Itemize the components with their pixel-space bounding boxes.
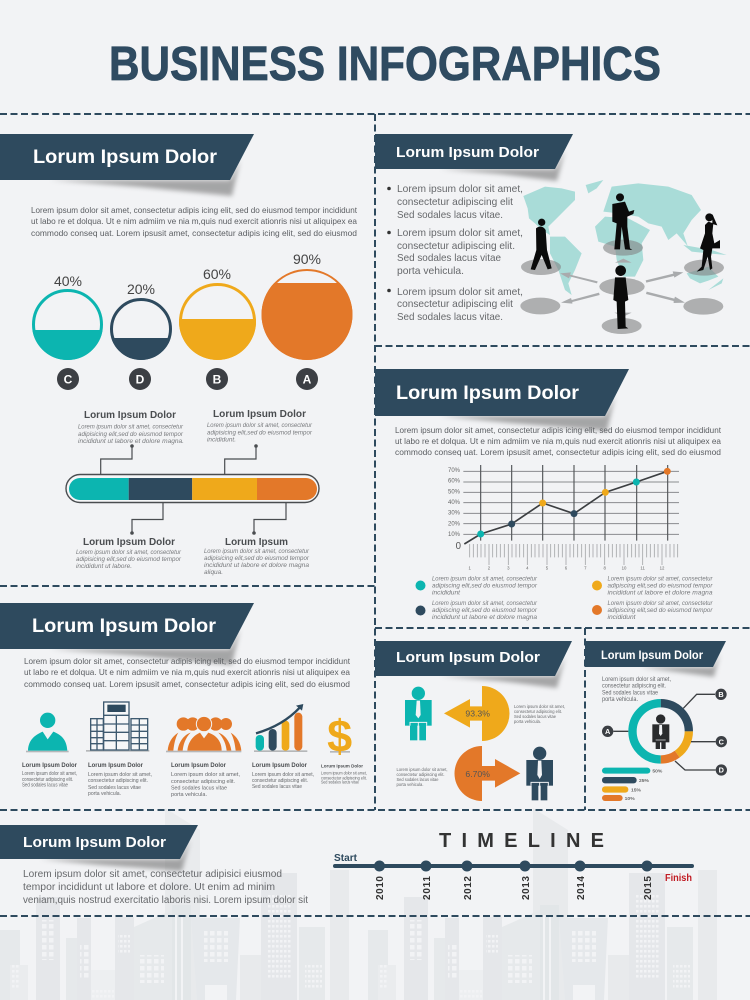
caption: building: porta vehicula. [88,791,121,797]
timeline heading: TIMELINE [439,830,604,852]
bullet list: Sed sodales lacus vitae. [397,312,503,323]
paragraph: Lorem ipsum dolor sit amet, consectetur adipis icing elit, sed do eiusmod tempor incididunt [24,656,351,666]
bullet list: consectetur adipiscing elit. [397,241,515,252]
icon: person [28,713,67,751]
paragraph [602,677,671,703]
chart legend: incididunt ut labore et dolore magna [432,615,538,621]
percent bars: 50% [652,769,663,775]
line chart: 11 [640,565,645,570]
caption: team: Lorem ipsum dolor sit amet, [171,772,240,778]
line chart: 20% [448,521,461,527]
banner: section seven: Lorum Ipsum Dolor [23,834,166,851]
timeline: 2015 [643,876,654,900]
chart legend: Lorem ipsum dolor sit amet, consectetur [608,601,713,607]
banner: section five: Lorum Ipsum Dolor [396,649,540,666]
note: bottom right: adipisicing elit,sed do eiusmod tempor [204,556,310,562]
circle chart: D 20% [111,281,171,390]
caption: dollar: Sed sodales lacus vitae [321,780,360,784]
icon: teal man [405,687,432,740]
chart legend: adipiscing elit,sed do eiusmod tempor [432,584,538,590]
chart legend: incididunt ut labore et dolore magna [608,590,713,596]
connector lines [101,444,286,535]
line chart [448,465,679,570]
caption: person [22,763,78,788]
chart: orange arrow 6.70%: 6.70% [465,769,490,779]
caption: team: Lorum Ipsum Dolor [171,763,227,769]
icon: navy man [526,747,553,800]
comparison graphic [405,686,553,801]
caption: dollar: Lorem ipsum dolor sit amet, [321,770,367,776]
banner: section two [375,134,573,181]
panel: intro with percent circles [0,134,358,576]
caption: building: Lorem ipsum dolor sit amet, [88,772,152,778]
caption: building: Sed sodales lacus vitae [88,785,141,791]
banner: section three: Lorum Ipsum Dolor [396,383,580,404]
line chart: 4 [526,565,529,570]
chart: yellow arrow 93.3% [444,686,509,741]
circle chart: C 40%: C [64,372,73,386]
city skyline background [0,808,717,1000]
icon: office building [91,702,148,750]
panel: comparison arrows [375,641,572,801]
bullet list [387,184,523,323]
line chart: 50% [448,489,461,495]
banner: section three [375,369,629,431]
chart legend [416,576,714,621]
note: orange arrow: consectetur adipiscing elit. [396,772,444,777]
caption: dollar: Lorum Ipsum Dolor [321,764,363,770]
icon: man in donut [652,714,669,749]
banner: section four [0,603,254,665]
circle chart: B 60% [179,266,256,390]
caption: team: consectetur adipiscing elit. [171,779,235,785]
banner: section one [0,134,254,196]
circle chart: D 20%: 20% [127,281,155,297]
note: bottom left: Lorum Ipsum Dolor [83,537,175,548]
note: top right: Lorum Ipsum Dolor [213,409,306,420]
note: bottom left: Lorem ipsum dolor sit amet, consectetur [76,550,182,556]
central person [613,265,628,329]
percent bars: 25% [639,778,650,784]
paragraph: Lorem ipsum dolor sit amet, consectetur adipis icing elit, sed do eiusmod tempor incididunt [395,425,722,435]
timeline [334,853,692,900]
banner: section four: Lorum Ipsum Dolor [32,616,217,637]
caption: chart: consectetur adipiscing elit. [252,778,308,784]
banner: section two: Lorum Ipsum Dolor [396,144,539,161]
caption: person: Lorum Ipsum Dolor [22,763,78,769]
icon: growth chart [256,704,303,751]
paragraph: Lorem ipsum dolor sit amet, consectetur adipisici eiusmod [23,869,282,880]
circle chart: C 40%: 40% [54,273,82,289]
line chart: 8 [603,565,606,570]
note: top left [78,410,184,445]
note: top right: incididunt. [207,438,236,444]
paragraph: Lorem ipsum dolor sit amet, [602,677,671,683]
note: orange arrow: Lorem ipsum dolor sit amet, [396,767,448,772]
caption: chart: Lorum Ipsum Dolor [252,763,308,769]
note: bottom left [76,537,182,570]
percent bars: 15% [631,787,642,793]
chart legend: incididunt [608,615,636,621]
paragraph: commodo conseq uat. Lorem ipsusit amet, consectetur adipis icing elit, sed do eiusmod [24,679,350,689]
banner: section one: Lorum Ipsum Dolor [33,147,218,168]
bullet list: Sed sodales lacus vitae. [397,210,503,221]
chart: orange arrow 6.70% [454,746,520,801]
callout badges: D [719,766,724,775]
callout lines [613,694,716,770]
note: top left: Lorum Ipsum Dolor [84,410,176,421]
caption: building [88,763,152,797]
caption: team: porta vehicula. [171,792,207,798]
panel: line chart [375,369,722,621]
paragraph: porta vehicula. [602,697,638,703]
icon row [26,702,352,761]
chart legend: Lorem ipsum dolor sit amet, consectetur [432,576,538,582]
caption: dollar [321,764,367,784]
circle chart: A 90%: 90% [293,251,321,267]
line chart: 5 [546,565,549,570]
man in suit [612,193,634,250]
bullet list: Lorem ipsum dolor sit amet, [397,228,523,239]
paragraph [31,205,358,238]
paragraph: Sed sodales lacus vitae [602,690,659,696]
line chart: 6 [565,565,568,570]
line chart: 60% [448,479,461,485]
walking man [531,219,552,270]
caption: chart: Sed sodales lacus vitae [252,784,302,790]
chart legend: adipiscing elit,sed do eiusmod tempor [608,608,714,614]
bullet list: Lorem ipsum dolor sit amet, [397,287,523,298]
note: yellow arrow [514,704,565,724]
paragraph: Lorem ipsum dolor sit amet, consectetur adipis icing elit, sed do eiusmod tempor incididunt [31,205,358,215]
line chart: 10 [622,565,627,570]
bullet list: porta vehicula. [397,266,464,277]
note: yellow arrow: consectetur adipiscing elit. [514,709,562,714]
caption: building: Lorum Ipsum Dolor [88,763,144,769]
note: top left: adipisicing elit,sed do eiusmod tempor [78,432,184,438]
note: top left: Lorem ipsum dolor sit amet, consectetur [78,424,184,430]
chart legend: adipiscing elit,sed do eiusmod tempor [432,608,538,614]
percent bars: 10% [625,796,635,802]
note: top right: Lorem ipsum dolor sit amet, consectetur [207,423,313,429]
chart legend: Lorem ipsum dolor sit amet, consectetur [432,601,538,607]
platforms [520,240,724,334]
world map [523,180,727,295]
people network [520,193,724,334]
icon: dollar: $ [327,710,352,761]
note: yellow arrow: porta vehicula. [514,719,541,724]
paragraph [395,425,722,457]
donut chart [602,689,727,802]
woman with bag [697,213,720,272]
circle chart: A 90% [262,251,352,390]
caption: person: consectetur adipiscing elit. [22,777,73,783]
paragraph: commodo conseq uat. Lorem ipsusit amet, consectetur adipis icing elit, sed do eiusmod [395,447,721,457]
note: top right [207,409,313,444]
caption: building: consectetur adipiscing elit. [88,778,148,784]
paragraph: commodo conseq uat. Lorem ipsusit amet, consectetur adipis icing elit, sed do eiusmod [31,228,357,238]
percent bars [602,768,663,802]
bullet list: Sed sodales lacus vitae [397,253,501,264]
paragraph: ut labo re et dolqua. Ut e nim admiim ve nia m,quis nud exercit ationris nisi ut aliquipex ea [31,216,357,226]
circle chart: D 20%: D [136,372,145,386]
panel: business icons [0,603,367,798]
panel: world map and people [375,134,727,334]
arrows [560,259,685,317]
paragraph: veniam,quis nostrud exercitatio laboris nisi. Lorem ipsum dolor sit [23,895,308,906]
timeline: 2012 [463,876,474,900]
paragraph [24,656,351,689]
caption: person: Lorem ipsum dolor sit amet, [22,771,77,777]
note: yellow arrow: Sed sodales lacus vitae [514,714,557,719]
note: bottom left: adipisicing elit,sed do eiusmod tempor [76,557,182,563]
caption: dollar: consectetur adipiscing elit. [321,776,367,780]
circle chart: C 40% [32,273,103,390]
note: orange arrow [396,767,448,787]
note: top left: incididunt ut labore et dolore magna. [78,439,184,445]
panel: timeline section [0,825,692,906]
callout badges: A [605,727,611,736]
caption: team: Sed sodales lacus vitae [171,786,227,792]
line chart: 1 [468,565,471,570]
bullet list: Lorem ipsum dolor sit amet, [397,184,523,195]
line chart: 12 [660,565,665,570]
callout badges: B [718,690,724,699]
caption: chart: Lorem ipsum dolor sit amet, [252,772,314,778]
note: bottom left: incididunt ut labore. [76,564,132,570]
bullet list: consectetur adipiscing elit [397,197,513,208]
timeline: 2014 [576,876,587,900]
note: bottom right [204,537,310,576]
line chart: 0 [456,541,461,552]
paragraph: ut labo re et dolqua. Ut e nim admiim ve nia m,quis nud exercit ationris nisi ut aliquipex ea [395,436,721,446]
line chart: 30% [448,511,461,517]
line chart: 3 [507,565,510,570]
chart: yellow arrow 93.3%: 93.3% [465,709,490,719]
timeline: 2013 [521,876,532,900]
note: top right: adipisicing elit,sed do eiusmod tempor [207,430,313,436]
line chart: 2 [488,565,491,570]
note: bottom right: aliqua. [204,570,223,576]
line chart: 7 [584,565,587,570]
note: bottom right: Lorum Ipsum [225,537,288,548]
line chart: 10% [448,532,461,538]
paragraph: tempor incididunt ut labore et dolore. Ut enim ad minim [23,882,275,893]
caption: person: Sed sodales lacus vitae [22,782,68,788]
segmented progress bar [66,474,319,502]
note: orange arrow: porta vehicula. [396,782,424,787]
banner: section five [375,641,572,688]
icon: team [168,716,241,751]
paragraph: consectetur adipiscing elit. [602,684,666,690]
note: bottom right: Lorem ipsum dolor sit amet, consectetur [204,549,310,555]
timeline: Start [334,853,358,864]
title: BUSINESS INFOGRAPHICS [109,37,661,91]
note: yellow arrow: Lorem ipsum dolor sit amet, [514,704,565,709]
timeline: 2011 [422,876,433,900]
line chart: 70% [448,468,461,474]
circle chart: A 90%: A [303,372,312,386]
banner: section six: Lorum Ipsum Dolor [601,648,703,662]
timeline: 2010 [375,876,386,900]
circle chart: B 60%: 60% [203,266,231,282]
caption: team [171,763,240,798]
paragraph [23,869,308,906]
timeline: Finish [665,873,692,884]
bullet list: consectetur adipiscing elit [397,299,513,310]
banner: section six [585,641,726,677]
note: bottom right: incididunt ut labore et dolore magna [204,563,310,569]
note: orange arrow: Sed sodales lacus vitae [396,777,439,782]
callout badges [602,689,727,776]
paragraph: ut labo re et dolqua. Ut e nim admiim ve nia m,quis nud exercit ationris nisi ut aliquipex ea [24,667,350,677]
line chart: 40% [448,500,461,506]
chart legend: adipiscing elit,sed do eiusmod tempor [608,584,714,590]
banner: section seven [0,825,198,871]
chart legend: Lorem ipsum dolor sit amet, consectetur [608,576,713,582]
chart legend: incididunt [432,590,460,596]
callout badges: C [719,737,725,746]
caption: chart [252,763,314,790]
panel: donut chart [585,641,727,802]
circle chart: B 60%: B [213,372,222,386]
